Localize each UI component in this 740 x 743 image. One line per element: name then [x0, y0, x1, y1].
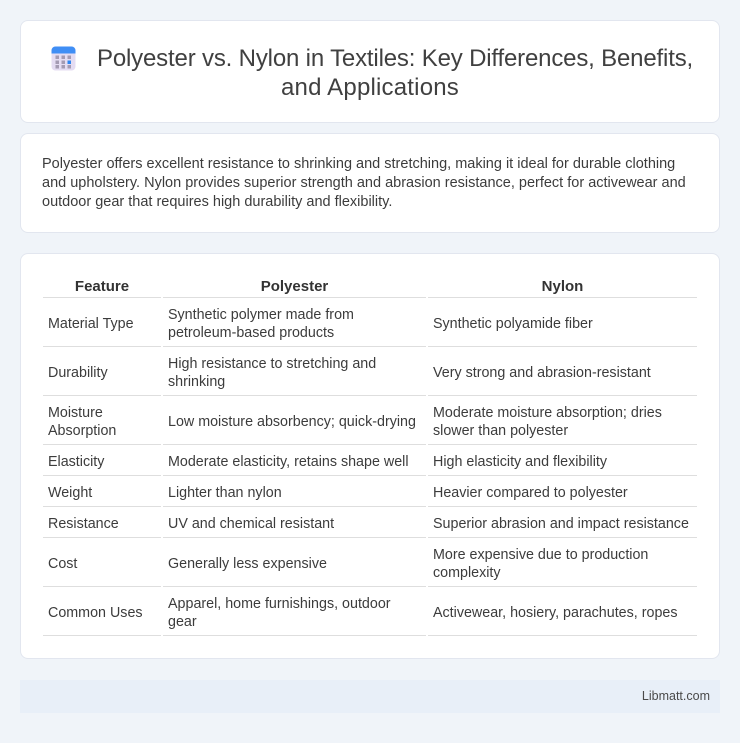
row: moisture absorption: slower than polyester: [433, 423, 568, 439]
panel: header: [20, 20, 720, 123]
row: moisture absorption: Low moisture absorbency; quick-drying: [168, 414, 416, 430]
row: weight: Weight: [48, 485, 92, 501]
row: material type: petroleum-based products: [168, 325, 334, 341]
row: moisture absorption: Moderate moisture absorption; dries: [433, 405, 662, 421]
row: durability: [48, 356, 651, 390]
panel: comparison table: [20, 253, 720, 659]
row: moisture absorption: [48, 405, 662, 439]
footer bar: [20, 680, 720, 713]
footer credit: Libmatt.com: [642, 689, 710, 703]
table header row: [75, 278, 583, 295]
table header row: Feature: [75, 278, 129, 295]
title: Polyester vs. Nylon in Textiles: Key Differences, Benefits,: [97, 45, 693, 72]
intro paragraph: [42, 156, 686, 210]
row: moisture absorption: Absorption: [48, 423, 116, 439]
row: cost: More expensive due to production: [433, 547, 648, 563]
table header row: Nylon: [542, 278, 583, 295]
row: durability: Very strong and abrasion-resistant: [433, 365, 651, 381]
row: common uses: Apparel, home furnishings, outdoor: [168, 596, 391, 612]
row: common uses: [48, 596, 678, 630]
row: resistance: Resistance: [48, 516, 119, 532]
row: elasticity: Moderate elasticity, retains shape well: [168, 454, 409, 470]
row: material type: Material Type: [48, 316, 134, 332]
row: weight: [48, 485, 628, 501]
row: weight: Lighter than nylon: [168, 485, 282, 501]
row: cost: Generally less expensive: [168, 556, 327, 572]
row: common uses: Activewear, hosiery, parachutes, ropes: [433, 605, 678, 621]
row: material type: Synthetic polyamide fiber: [433, 316, 593, 332]
row: material type: [48, 307, 593, 341]
row: durability: Durability: [48, 365, 108, 381]
row: cost: [48, 547, 648, 581]
row: material type: Synthetic polymer made from: [168, 307, 354, 323]
row: elasticity: High elasticity and flexibility: [433, 454, 607, 470]
row: resistance: Superior abrasion and impact resistance: [433, 516, 689, 532]
row: resistance: [48, 516, 689, 532]
table header row: Polyester: [261, 278, 328, 295]
row: weight: Heavier compared to polyester: [433, 485, 628, 501]
row: common uses: gear: [168, 614, 197, 630]
intro paragraph: Polyester offers excellent resistance to shrinking and stretching, making it ideal for durable clothing: [42, 156, 675, 172]
intro paragraph: outdoor gear that requires high durability and flexibility.: [42, 194, 392, 210]
intro paragraph: and upholstery. Nylon provides superior strength and abrasion resistance, perfect for activewear and: [42, 175, 686, 191]
row: cost: complexity: [433, 565, 501, 581]
row: moisture absorption: Moisture: [48, 405, 103, 421]
row: durability: High resistance to stretching and: [168, 356, 376, 372]
row: common uses: Common Uses: [48, 605, 143, 621]
row: elasticity: Elasticity: [48, 454, 104, 470]
row: resistance: UV and chemical resistant: [168, 516, 334, 532]
row: durability: shrinking: [168, 374, 225, 390]
title: and Applications: [281, 74, 459, 101]
row: elasticity: [48, 454, 607, 470]
row: cost: Cost: [48, 556, 77, 572]
panel: intro text: [20, 133, 720, 233]
icon: calendar app: [52, 46, 76, 70]
title: [97, 45, 693, 101]
